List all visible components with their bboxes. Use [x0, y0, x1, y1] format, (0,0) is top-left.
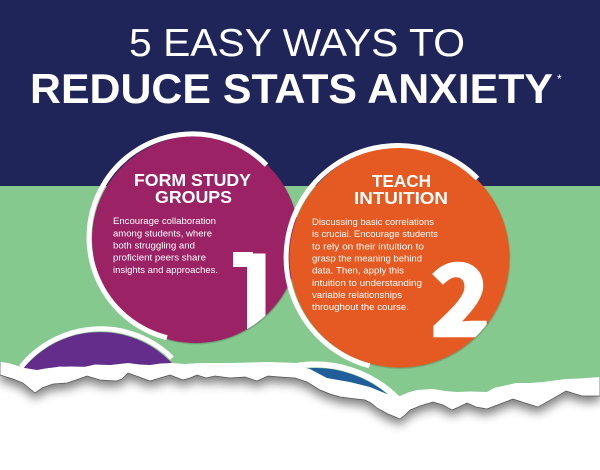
- text block: tip 1: [113, 216, 218, 275]
- text block: tip 2: [312, 217, 438, 312]
- text block: tip 1: among students, where: [113, 228, 212, 238]
- title: 5 EASY WAYS TO: [129, 22, 465, 65]
- numeral 1: 1: [215, 201, 289, 378]
- numeral 1: [233, 252, 266, 330]
- panel: tip 3 partly torn away: [19, 326, 174, 370]
- text block: tip 1: Encourage collaboration: [113, 216, 216, 226]
- heading: form study groups: [135, 174, 251, 203]
- text block: tip 2: intuition to understanding: [312, 278, 422, 288]
- panel: tip 2 teach intuition: [286, 146, 510, 368]
- heading: form study groups: GROUPS: [155, 187, 232, 207]
- heading: teach intuition: INTUITION: [354, 188, 448, 208]
- text block: tip 2: is crucial. Encourage students: [312, 229, 438, 239]
- heading: teach intuition: TEACH: [372, 171, 431, 191]
- text block: tip 1: proficient peers share: [113, 253, 206, 263]
- text block: tip 2: to rely on their intuition to: [312, 241, 424, 251]
- title: *: [557, 72, 562, 86]
- heading: teach intuition: [355, 175, 447, 204]
- title: [32, 28, 562, 104]
- numeral 2: 2: [430, 220, 491, 366]
- text block: tip 2: Discussing basic correlations: [312, 217, 434, 227]
- green background: [0, 186, 600, 396]
- panel: tip 3 partly torn away: FOSTER: [57, 362, 128, 382]
- text block: tip 1: both struggling and: [113, 240, 195, 250]
- panel: tip 4 partly torn away: [296, 361, 399, 396]
- text block: tip 2: grasp the meaning behind: [312, 254, 422, 264]
- text block: tip 2: variable relationships: [312, 290, 402, 300]
- panel: tip 1 form study groups: [86, 131, 297, 344]
- heading: form study groups: FORM STUDY: [134, 170, 251, 190]
- header band: [0, 0, 600, 186]
- title: REDUCE STATS ANXIETY: [30, 65, 553, 112]
- text block: tip 2: data. Then, apply this: [312, 266, 404, 276]
- text block: tip 1: insights and approaches.: [113, 265, 218, 275]
- text block: tip 2: throughout the course.: [312, 302, 409, 312]
